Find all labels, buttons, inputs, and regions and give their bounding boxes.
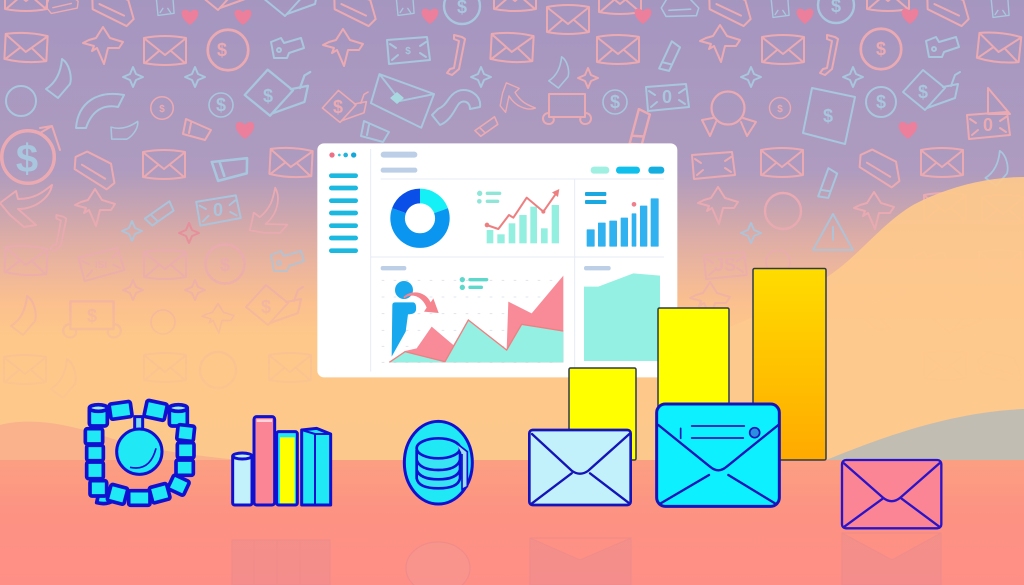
background pattern of mail and money icons: $ [87,306,97,326]
row at y 305 and below [123,280,143,300]
top partial row [89,0,137,27]
background pattern of mail and money icons: $ [405,46,411,57]
row at y 48 [4,32,48,63]
floor [0,460,1024,585]
icon: coin stack badge [404,421,472,504]
background pattern of mail and money icons: $ [918,82,928,102]
floor reflections [232,533,941,585]
background pattern of mail and money icons: $ [159,104,165,115]
bar chart [587,198,659,247]
donut chart [398,196,442,241]
header placeholders [381,152,417,173]
background pattern of mail and money icons: $ [217,40,227,60]
background pattern of mail and money icons: $ [610,92,620,112]
row at y 130 [110,120,138,140]
area chart: edge line [389,320,563,362]
background pattern of mail and money icons: $ [263,86,273,106]
hill: grey right [826,409,1024,460]
background gradient [0,0,1024,460]
icon: 3D bar columns [233,417,331,505]
curved arrow [403,292,439,313]
row at y 235 [50,215,66,251]
row at y 210 [0,185,52,227]
icon: pink envelope [842,460,941,528]
bar chart legend [585,192,606,204]
background pattern of mail and money icons: $ [876,92,886,112]
background pattern of mail and money icons: $ [220,255,230,275]
right area label [584,266,611,270]
bar: medium yellow [658,308,729,460]
bar: tall gold [753,268,826,460]
background pattern of mail and money icons: 0 [213,200,223,220]
background pattern of mail and money icons: 0 [983,115,993,135]
background pattern of mail and money icons: $ [823,106,833,126]
hill: left pink [0,422,240,460]
row at y 105 [6,86,36,116]
background pattern of mail and money icons: $ [216,95,226,115]
area chart: teal series [390,320,563,362]
right area chart [584,273,660,361]
background pattern of mail and money icons: 0 [662,87,672,107]
bars: line and bar chart [487,205,559,243]
area chart grid [382,280,557,362]
bar: small yellow [569,368,636,460]
background pattern of mail and money icons: $ [777,104,783,115]
background pattern of mail and money icons: $ [876,39,886,59]
area chart label [381,266,406,270]
row at y 262 [4,245,48,276]
window dots [329,152,356,158]
row at y 165 [2,131,54,183]
line and bar chart legend [477,191,501,204]
background pattern of mail and money icons: $ [16,137,38,181]
person figure [392,281,416,357]
background pattern of mail and money icons: $ [261,297,271,317]
background pattern of mail and money icons: ISI [95,260,107,271]
dashboard panel [317,143,677,377]
background pattern of mail and money icons [0,0,1022,338]
area chart: red series [389,276,563,362]
hill: peach right [730,177,1024,460]
panel dividers [371,149,664,372]
sidebar menu [329,173,358,253]
area chart legend [460,277,488,290]
icon: light blue envelope [529,430,631,505]
background pattern of mail and money icons: JS [714,255,736,275]
background pattern of mail and money icons: $ [333,97,343,117]
icon: cyan envelope [657,404,779,506]
header buttons [591,167,664,174]
row at y 77 [46,59,71,98]
trend line with arrow [485,189,559,229]
icon: ring of beads with sphere [85,400,195,505]
